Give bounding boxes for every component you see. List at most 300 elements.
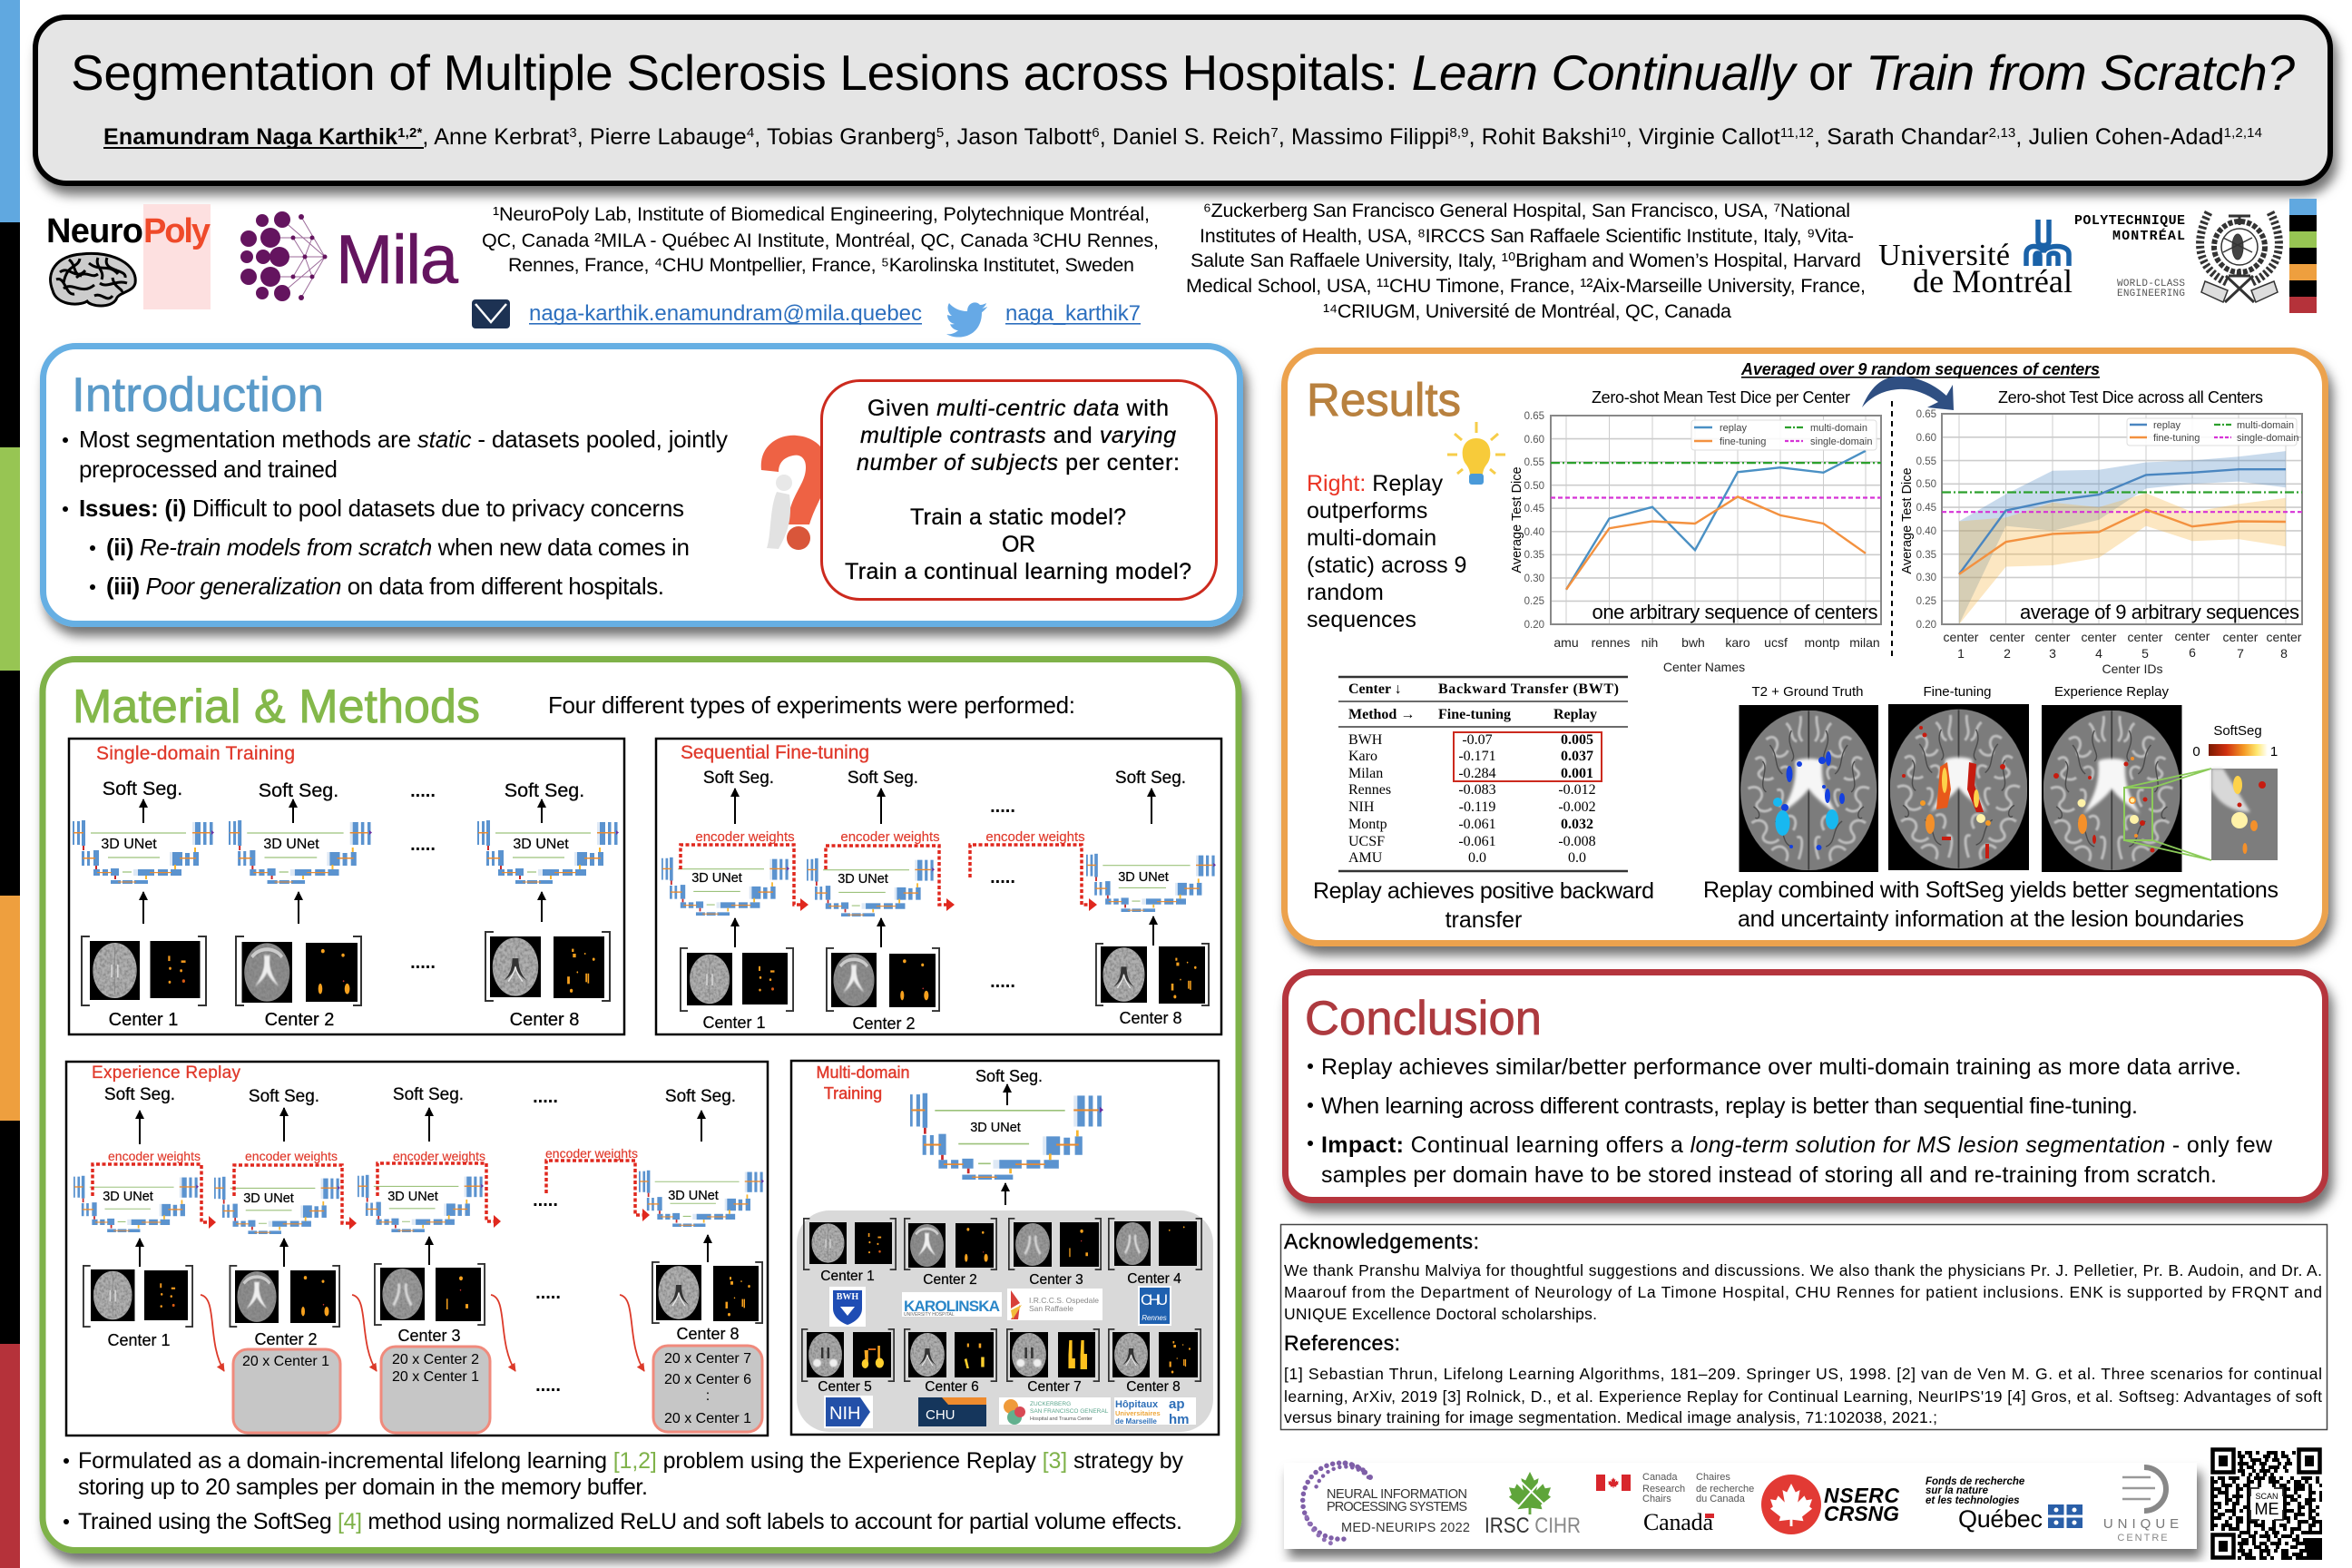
authors: , Rohit Bakshi: [1469, 124, 1611, 150]
contact: email and twitter: [472, 299, 1141, 338]
methods bullets: Formulated as a domain-incremental lifelong learning [1,2] problem using the Experience Replay [3] strategy by: [78, 1448, 1183, 1474]
column: center 2 with memory: Center 2: [254, 1330, 318, 1348]
table: backward transfer: Center ↓: [1348, 681, 1402, 697]
diagram: single-domain training: [69, 739, 624, 1034]
column: center 1: [73, 778, 214, 1030]
column: center 8 with memory: 20 x Center 1: [664, 1411, 751, 1426]
icon: question mark figure: [761, 436, 828, 550]
acknowledgements: UNIQUE Excellence Doctoral scholarships.: [1284, 1305, 1597, 1323]
legend: replay: [1720, 423, 1747, 434]
chart: test dice across all centers: [1900, 388, 2302, 676]
references: learning, ArXiv, 2019 [3] Rolnick, D., et al. Experience Replay for Continual Learning, NeurIPS'19 [4] Gros, et al. Softseg: Advantages of soft: [1284, 1387, 2322, 1406]
column: center 8: 3D UNet: [1118, 870, 1169, 885]
affiliations right: Institutes of Health, USA, ⁸IRCCS San Raffaele Scientific Institute, Italy, ⁹Vita-: [1200, 225, 1854, 247]
row 1 centers: Center 3: [1029, 1272, 1083, 1288]
chart: test dice across all centers: center: [2175, 629, 2210, 643]
hospital logos row 2: NIH: [829, 1404, 860, 1424]
image: t2 with ground truth: [1739, 684, 1878, 872]
affiliations right: ⁶Zuckerberg San Francisco General Hospital, San Francisco, USA, ⁷National: [1203, 200, 1850, 221]
column: center 8: 3D UNet: [513, 837, 569, 852]
hospital logos row 1: UNIVERSITY HOSPITAL: [904, 1312, 955, 1318]
table: backward transfer: Milan: [1348, 766, 1383, 781]
table: backward transfer: 0.005: [1561, 732, 1593, 748]
sponsor logos band: [1284, 1463, 2197, 1549]
authors: 8,9: [1449, 125, 1468, 141]
callout: static or continual: Train a static model?: [910, 505, 1126, 530]
diagram: experience replay: .....: [533, 1087, 558, 1107]
chart: mean test dice per center: 0.35: [1524, 550, 1544, 561]
panel: results: [1285, 350, 2325, 944]
hospital logos row 1: CHU: [1141, 1291, 1168, 1308]
chart: test dice across all centers: 1: [1957, 646, 1965, 661]
authors: 1,2*: [397, 125, 422, 141]
callout: static or continual: [822, 381, 1216, 599]
column: center 1: Center 1: [107, 1331, 171, 1349]
logo: canada research chairs: [1596, 1472, 1754, 1535]
logo: canada research chairs: Chaires: [1696, 1472, 1730, 1483]
table: backward transfer: Replay: [1553, 707, 1597, 722]
hospital logos row 2: Hôpitaux: [1115, 1399, 1159, 1410]
authors: , Julien Cohen-Adad: [2015, 124, 2223, 150]
conclusion bullets: [1308, 1054, 2273, 1188]
authors: 3: [569, 125, 577, 141]
logo: Universite de Montreal: de Montréal: [1913, 263, 2073, 299]
logo: neurips: PROCESSING SYSTEMS: [1327, 1500, 1467, 1514]
icon: brain: [51, 253, 135, 306]
logo: nserc crsng: CRSNG: [1824, 1502, 1899, 1525]
column: center 8 with memory: 20 x Center 6: [664, 1372, 751, 1387]
table: backward transfer: -0.002: [1558, 799, 1596, 815]
chart: mean test dice per center: Average Test Dice: [1510, 466, 1524, 573]
chart: test dice across all centers: center: [1990, 630, 2025, 644]
column: center 1: [74, 1085, 224, 1371]
diagram: multi-domain training: [791, 1061, 1219, 1435]
heading: material and methods: Material & Methods: [73, 681, 480, 733]
column: center 8: Soft Seg.: [505, 779, 584, 801]
table: backward transfer: -0.171: [1458, 749, 1496, 764]
column: center 8 with memory: Soft Seg.: [665, 1087, 736, 1106]
table: backward transfer: 0.0: [1568, 850, 1586, 866]
column: center 8: encoder weights: [985, 829, 1085, 845]
column: center 1: Soft Seg.: [703, 769, 774, 788]
logo: canada research chairs: de recherche: [1696, 1484, 1754, 1494]
image: t2 with ground truth: T2 + Ground Truth: [1752, 684, 1863, 700]
chart: mean test dice per center: Center Names: [1663, 660, 1745, 674]
column: center 2 with memory: encoder weights: [245, 1149, 338, 1163]
logo: Polytechnique Montreal: ENGINEERING: [2117, 289, 2185, 299]
affiliations left: ¹NeuroPoly Lab, Institute of Biomedical Engineering, Polytechnique Montréal,: [493, 203, 1150, 225]
experiments intro line: Four different types of experiments were performed:: [548, 691, 1075, 719]
logo: canada research chairs: Canada: [1642, 1472, 1678, 1483]
column: center 8 with memory: [545, 1087, 764, 1432]
chart: test dice across all centers: center: [1944, 630, 1979, 644]
references: [1] Sebastian Thrun, Lifelong Learning Algorithms, 181–209. Springer US, 1998. [2] van de Ven M. G. et al. Three scenarios for continual: [1284, 1365, 2322, 1383]
references: References:: [1284, 1331, 1400, 1355]
column: center 2: 3D UNet: [263, 837, 319, 852]
icon: emblem: [2200, 212, 2278, 302]
qr code: ME: [2254, 1500, 2279, 1518]
qr code: [2210, 1450, 2322, 1558]
chart: mean test dice per center: 0.50: [1524, 481, 1544, 492]
heading: results: Results: [1307, 374, 1461, 426]
authors: 4: [747, 125, 754, 141]
authors: , Virginie Callot: [1626, 124, 1780, 150]
right colour strip: [2289, 199, 2317, 313]
authors: 2,13: [1989, 125, 2015, 141]
table: backward transfer: Karo: [1348, 749, 1377, 764]
legend: [2127, 418, 2298, 446]
legend: softseg colour bar: [2192, 723, 2278, 760]
chart heading: Averaged over 9 random sequences of centers: [1740, 360, 2100, 378]
callout: static or continual: Train a continual learning model?: [845, 559, 1191, 584]
chart: test dice across all centers: 0.30: [1916, 573, 1936, 583]
chart: test dice across all centers: Center IDs: [2102, 662, 2162, 676]
column: center 3 with memory: Center 3: [397, 1327, 461, 1345]
heading: introduction: Introduction: [72, 368, 324, 422]
authors: 6: [1092, 125, 1100, 141]
figure caption: Replay combined with SoftSeg yields better segmentations: [1703, 877, 2278, 903]
table: backward transfer: UCSF: [1348, 834, 1385, 849]
left colour strip: [0, 0, 20, 1568]
logo: Polytechnique Montreal: POLYTECHNIQUE: [2074, 213, 2185, 229]
authors: , Jason Talbott: [944, 124, 1092, 150]
chart: mean test dice per center: amu: [1553, 635, 1579, 650]
diagram: single-domain training: .....: [410, 835, 436, 855]
column: center 3 with memory: [358, 1085, 515, 1433]
callout: static or continual: number of subjects per center:: [857, 450, 1180, 475]
intro bullets: (ii) Re-train models from scratch when new data comes in: [106, 534, 690, 561]
methods bullets: [64, 1448, 1183, 1534]
hospital logos row 1: San Raffaele: [1029, 1304, 1073, 1313]
authors: 1,2,14: [2224, 125, 2262, 141]
table: backward transfer: -0.284: [1458, 766, 1496, 781]
table: backward transfer: -0.008: [1558, 834, 1596, 849]
inset zoom: [2124, 769, 2278, 860]
column: center 1: Soft Seg.: [103, 778, 182, 799]
chart: mean test dice per center: ucsf: [1764, 635, 1788, 650]
chart: test dice across all centers: 0.50: [1916, 479, 1936, 490]
authors: , Massimo Filippi: [1279, 124, 1449, 150]
panel: conclusion: [1285, 973, 2325, 1200]
intro bullets: (iii) Poor generalization on data from different hospitals.: [106, 573, 664, 600]
table: backward transfer: -0.061: [1458, 817, 1496, 832]
logo: fonds de recherche quebec: [1926, 1476, 2082, 1533]
column: center 8: [477, 779, 619, 1030]
column: center 1: 3D UNet: [691, 871, 742, 886]
table: backward transfer: -0.012: [1558, 782, 1596, 798]
column: center 2 with memory: 3D UNet: [243, 1191, 294, 1206]
chart: test dice across all centers: center: [2082, 630, 2117, 644]
table: backward transfer: 0.032: [1561, 817, 1593, 832]
affiliations left: QC, Canada ²MILA - Québec AI Institute, Montréal, QC, Canada ³CHU Rennes,: [482, 230, 1159, 251]
hospital logos row 2: CHU: [926, 1407, 955, 1423]
column: center 8: [970, 769, 1216, 1027]
chart: mean test dice per center: 0.65: [1524, 411, 1544, 422]
panel: introduction: [44, 347, 1240, 624]
chart: mean test dice per center: nih: [1642, 635, 1658, 650]
qr code: SCAN: [2255, 1492, 2278, 1501]
logo: unique centre: [2103, 1467, 2183, 1544]
column: center 3 with memory: 3D UNet: [387, 1190, 438, 1204]
chart: test dice across all centers: average of 9 arbitrary sequences: [2020, 601, 2299, 623]
chart: test dice across all centers: Average Test Dice: [1900, 467, 1915, 574]
image: fine-tuning prediction: [1888, 684, 2029, 870]
conclusion bullets: samples per domain have to be stored instead of storing all and re-training from scratch.: [1321, 1162, 2217, 1188]
conclusion bullets: Impact: Continual learning offers a long-term solution for MS lesion segmentation - only few: [1321, 1132, 2273, 1158]
column: center 3 with memory: Soft Seg.: [393, 1085, 464, 1104]
diagram: sequential fine-tuning: .....: [990, 972, 1015, 992]
twitter handle: naga_karthik7: [1005, 301, 1141, 326]
authors: 10: [1611, 125, 1626, 141]
authors: , Tobias Granberg: [754, 124, 936, 150]
affiliations right: [1186, 200, 1866, 322]
chart: mean test dice per center: karo: [1725, 635, 1750, 650]
hospital logos row 2: de Marseille: [1115, 1417, 1157, 1426]
column: center 1: 3D UNet: [103, 1190, 153, 1204]
row 1 centers: [804, 1219, 1201, 1288]
authors: , Sarath Chandar: [1814, 124, 1989, 150]
column: center 1: Center 1: [109, 1010, 178, 1030]
table: backward transfer: -0.119: [1459, 799, 1495, 815]
intro bullets: Issues: (i) Difficult to pool datasets due to privacy concerns: [79, 495, 684, 522]
chart: mean test dice per center: 0.45: [1524, 504, 1544, 514]
logo: canada research chairs: du Canada: [1696, 1494, 1746, 1504]
icon: curved arrow: [1862, 377, 1954, 410]
methods bullets: storing up to 20 samples per domain in the memory buffer.: [78, 1475, 648, 1500]
logo: Polytechnique Montreal: WORLD-CLASS: [2117, 279, 2185, 289]
authors: , Anne Kerbrat: [422, 124, 569, 150]
chart: test dice across all centers: 0.45: [1916, 503, 1936, 514]
results text: multi-domain: [1307, 525, 1436, 551]
gray panel: eight centers: [797, 1210, 1213, 1432]
chart: mean test dice per center: 0.25: [1524, 596, 1544, 607]
legend: single-domain: [2237, 433, 2298, 444]
logo: Mila: Mila: [336, 221, 459, 299]
diagram: single-domain training: .....: [410, 781, 436, 801]
logo: irsc cihr: IRSC CIHR: [1485, 1514, 1581, 1538]
column: center 2: Center 2: [265, 1010, 334, 1030]
intro bullets: Most segmentation methods are static - datasets pooled, jointly: [79, 426, 728, 453]
column: center 8 with memory: encoder weights: [545, 1146, 638, 1161]
hospital logos row 2: ZUCKERBERG: [1030, 1401, 1071, 1407]
logo: fonds de recherche quebec: Québec: [1958, 1505, 2043, 1533]
column: center 8 with memory: 3D UNet: [668, 1189, 719, 1203]
references: versus binary training for image segmentation. Medical image analysis, 71:102038, 2021.;: [1284, 1408, 1937, 1426]
hospital logos row 1: KAROLINSKA: [904, 1298, 1000, 1315]
logo: Polytechnique Montreal: [2074, 212, 2278, 302]
legend: fine-tuning: [1720, 436, 1766, 447]
logo: canada research chairs: Chairs: [1642, 1494, 1671, 1504]
logo: fonds de recherche quebec: Fonds de recherche: [1926, 1476, 2025, 1487]
hospital logos row 2: Universitaires: [1115, 1409, 1161, 1417]
chart: mean test dice per center: 0.40: [1524, 527, 1544, 538]
table: backward transfer: -0.083: [1458, 782, 1496, 798]
hospital logos row 2: ap: [1169, 1396, 1185, 1412]
email: naga-karthik.enamundram@mila.quebec: [529, 301, 922, 326]
panel: acknowledgements and references: [1281, 1225, 2327, 1430]
logo: Universite de Montreal: [1878, 220, 2073, 299]
table: backward transfer: Montp: [1348, 817, 1387, 832]
table: backward transfer: [1338, 677, 1628, 871]
hospital logos row 2: hm: [1169, 1412, 1189, 1427]
hospital logos row 2: Hospital and Trauma Center: [1030, 1416, 1093, 1422]
chart: test dice across all centers: 7: [2237, 646, 2244, 661]
column: center 2: [229, 779, 372, 1030]
chart: test dice across all centers: 0.40: [1916, 526, 1936, 537]
chart: mean test dice per center: one arbitrary sequence of centers: [1592, 601, 1878, 623]
diagram: sequential fine-tuning: Sequential Fine-tuning: [681, 742, 869, 763]
legend: fine-tuning: [2153, 433, 2200, 444]
callout: static or continual: OR: [1002, 532, 1035, 557]
chart: test dice across all centers: 0.20: [1916, 620, 1936, 631]
legend: [1691, 420, 1877, 450]
logo: NeuroPoly: Neuro: [46, 212, 143, 250]
conclusion bullets: When learning across different contrasts, replay is better than sequential fine-tuning.: [1321, 1093, 2138, 1119]
figure caption: and uncertainty information at the lesion boundaries: [1738, 906, 2244, 932]
intro bullets: preprocessed and trained: [79, 456, 338, 483]
title banner: [35, 17, 2330, 183]
legend: multi-domain: [1810, 423, 1867, 434]
column: center 2: encoder weights: [840, 829, 940, 845]
icon: envelope: [472, 299, 510, 328]
chart: mean test dice per center: milan: [1849, 635, 1880, 650]
results text: (static) across 9: [1307, 553, 1466, 578]
column: center 1: encoder weights: [695, 829, 795, 845]
chart: test dice across all centers: Zero-shot Test Dice across all Centers: [1998, 388, 2263, 407]
methods bullets: Trained using the SoftSeg [4] method using normalized ReLU and soft labels to account for partial volume effects.: [78, 1509, 1182, 1534]
column: center 8 with memory: 20 x Center 7: [664, 1351, 751, 1367]
column: center 3 with memory: 20 x Center 1: [392, 1369, 479, 1385]
table: backward transfer: NIH: [1348, 799, 1375, 815]
logo: unique centre: CENTRE: [2117, 1533, 2170, 1544]
legend: replay: [2153, 420, 2180, 431]
logo: Polytechnique Montreal: MONTRÉAL: [2112, 228, 2185, 244]
column: center 2: [807, 769, 955, 1033]
logo: nserc crsng: NSERC: [1824, 1484, 1899, 1507]
chart: test dice across all centers: center: [2267, 630, 2302, 644]
column: center 2 with memory: [214, 1087, 377, 1433]
table: backward transfer: Fine-tuning: [1438, 707, 1511, 722]
chart: mean test dice per center: bwh: [1681, 635, 1705, 650]
row 2 centers: Center 8: [1126, 1379, 1181, 1395]
logo: Universite de Montreal: Université: [1878, 239, 2010, 272]
heading: conclusion: Conclusion: [1305, 992, 1542, 1045]
row 1 centers: Center 2: [923, 1272, 977, 1288]
diagram: multi-domain training: Multi-domain: [816, 1063, 910, 1082]
results text: [1307, 471, 1466, 632]
chart: test dice across all centers: 0.55: [1916, 456, 1936, 467]
references: [1284, 1331, 2322, 1426]
legend: softseg colour bar: SoftSeg: [2213, 723, 2262, 739]
diagram: multi-domain training: Training: [824, 1084, 882, 1102]
table: backward transfer: 0.037: [1561, 749, 1593, 764]
logo: NeuroPoly: Poly: [143, 212, 211, 250]
diagram: single-domain training: Single-domain Training: [96, 743, 295, 764]
column: center 2 with memory: 20 x Center 1: [242, 1354, 329, 1369]
acknowledgements: We thank Pranshu Malviya for thoughtful suggestions and discussions. We also thank the physicians Pr. J. Pelletier, Pr. B. Audoin, and Dr. A.: [1284, 1261, 2322, 1279]
chart: mean test dice per center: Zero-shot Mean Test Dice per Center: [1592, 388, 1850, 407]
table caption: [1313, 878, 1654, 933]
hospital logos row 1: BWH: [837, 1292, 858, 1302]
panel: material and methods: [43, 659, 1239, 1550]
affiliations right: Salute San Raffaele University, Italy, ¹⁰Brigham and Women’s Hospital, Harvard: [1191, 250, 1861, 271]
table: backward transfer: BWH: [1348, 732, 1383, 748]
logo: irsc cihr: [1485, 1472, 1581, 1538]
chart: test dice across all centers: 2: [2004, 646, 2011, 661]
acknowledgements: [1284, 1230, 2322, 1323]
icon: light bulb: [1447, 422, 1505, 485]
logo: neurips: MED-NEURIPS 2022: [1341, 1521, 1470, 1535]
diagram: experience replay: .....: [535, 1376, 561, 1396]
diagram: experience replay: .....: [535, 1283, 561, 1303]
column: center 1: Soft Seg.: [104, 1085, 175, 1104]
chart: mean test dice per center: 0.20: [1524, 620, 1544, 631]
results text: Right: Replay: [1307, 471, 1444, 496]
logo: unique centre: UNIQUE: [2103, 1516, 2183, 1532]
diagram: sequential fine-tuning: [656, 739, 1221, 1034]
authors: , Pierre Labauge: [577, 124, 747, 150]
chart: mean test dice per center: [1510, 388, 1881, 674]
authors: 11,12: [1780, 125, 1814, 141]
table: backward transfer: -0.061: [1458, 834, 1496, 849]
hospital logos row 2: [824, 1396, 1196, 1428]
chart: mean test dice per center: 0.55: [1524, 457, 1544, 468]
diagram: sequential fine-tuning: .....: [990, 867, 1015, 887]
column: center 8 with memory: :: [706, 1388, 710, 1404]
affiliations left: [482, 203, 1159, 276]
legend: single-domain: [1810, 436, 1872, 447]
logo: neurips: [1303, 1463, 1470, 1544]
image: experience replay prediction: Experience Replay: [2054, 684, 2169, 700]
table: backward transfer: 0.0: [1468, 850, 1486, 866]
legend: multi-domain: [2237, 420, 2294, 431]
column: center 3 with memory: 20 x Center 2: [392, 1352, 479, 1367]
chart: test dice across all centers: 3: [2049, 646, 2056, 661]
chart: test dice across all centers: 8: [2280, 646, 2288, 661]
logo: neurips: NEURAL INFORMATION: [1327, 1487, 1467, 1502]
hospital logos row 1: [829, 1287, 1171, 1327]
table: backward transfer: -0.07: [1462, 732, 1493, 748]
chart: test dice across all centers: center: [2035, 630, 2071, 644]
diagram: sequential fine-tuning: .....: [990, 797, 1015, 817]
column: center 8: Soft Seg.: [1115, 769, 1186, 788]
logo: Mila: [240, 211, 459, 301]
diagram: experience replay: .....: [533, 1191, 558, 1210]
diagram: single-domain training: .....: [410, 953, 436, 973]
column: center 3 with memory: encoder weights: [393, 1149, 485, 1163]
column: center 2: 3D UNet: [838, 872, 888, 887]
column: center 2: Soft Seg.: [259, 779, 338, 801]
row 2 centers: Center 5: [818, 1379, 872, 1395]
hospital logos row 1: I.R.C.C.S. Ospedale: [1029, 1296, 1099, 1305]
chart: test dice across all centers: 0.65: [1916, 409, 1936, 420]
column: center 1: [662, 769, 808, 1032]
figure caption: [1703, 877, 2278, 932]
chart: mean test dice per center: montp: [1805, 635, 1840, 650]
table: backward transfer: Backward Transfer (BWT): [1438, 681, 1619, 697]
image: experience replay prediction: [2042, 684, 2181, 872]
chart: mean test dice per center: rennes: [1592, 635, 1630, 650]
affiliations right: ¹⁴CRIUGM, Université de Montréal, QC, Canada: [1323, 300, 1731, 322]
table: backward transfer: AMU: [1348, 850, 1383, 866]
logo: canada research chairs: Canada: [1643, 1509, 1713, 1535]
chart: test dice across all centers: center: [2128, 630, 2163, 644]
chart: test dice across all centers: 0.25: [1916, 596, 1936, 607]
chart: test dice across all centers: 6: [2189, 645, 2196, 660]
column: center 1: 3D UNet: [101, 837, 157, 852]
table: backward transfer: 0.001: [1561, 766, 1593, 781]
logo: fonds de recherche quebec: et les technologies: [1926, 1495, 2020, 1506]
